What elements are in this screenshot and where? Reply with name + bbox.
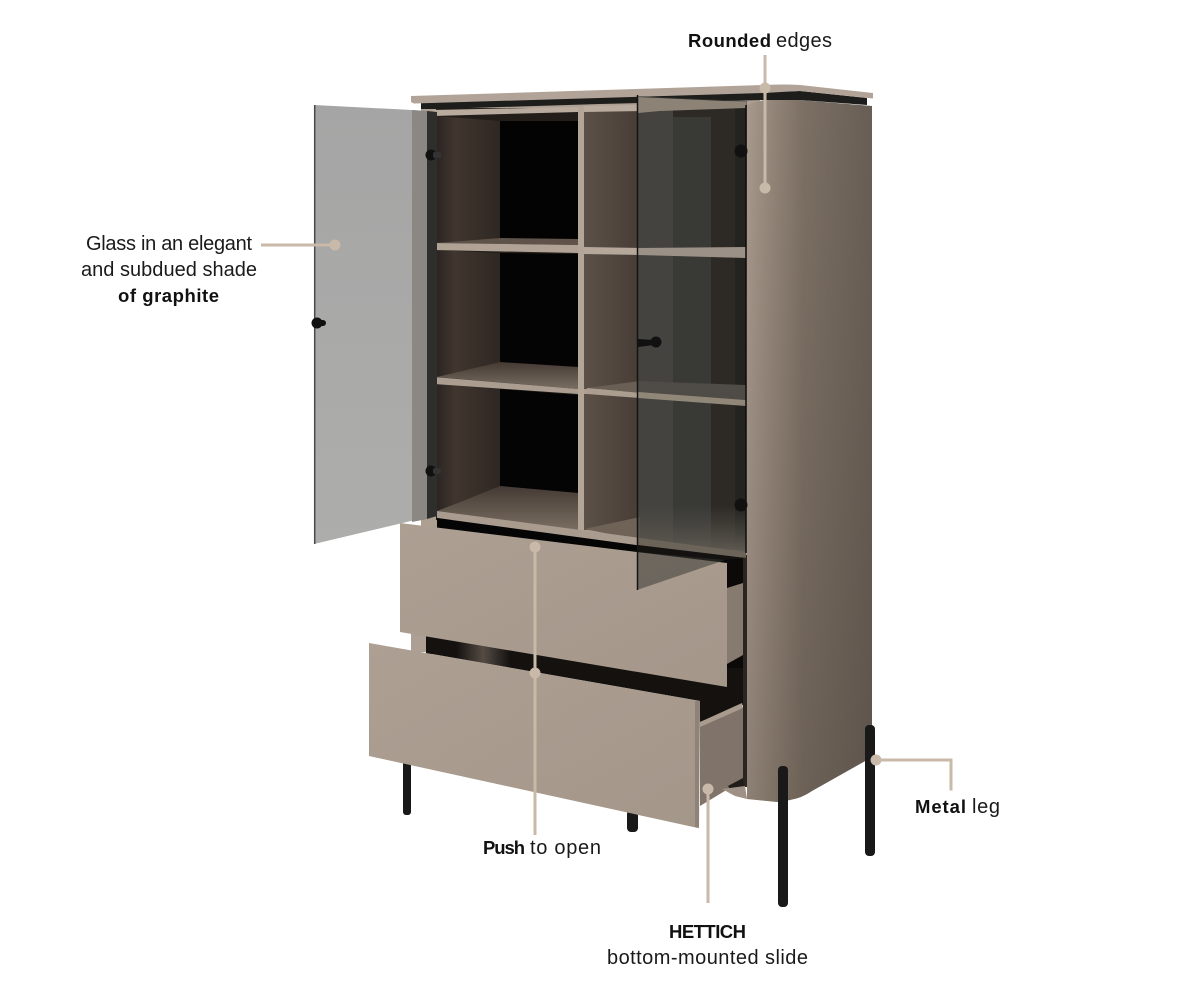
left door hinges and knob: [312, 150, 441, 476]
side panel with rounded edge: [746, 100, 872, 802]
bottom shelf: [437, 511, 746, 590]
lower carcass gap: [411, 555, 747, 787]
callout: push to open: Push: [483, 837, 525, 858]
callout: rounded edges: [688, 30, 832, 194]
rear legs: [403, 760, 638, 832]
lower drawer front: [369, 643, 700, 828]
callout: metal leg: Metal: [915, 796, 966, 817]
left shelves: [433, 107, 578, 530]
open left glass door: [314, 105, 437, 544]
upper drawer front: [400, 523, 727, 687]
callout: rounded edges: edges: [776, 30, 832, 52]
cabinet: [312, 84, 875, 907]
callout: rounded edges: Rounded: [688, 30, 771, 51]
carcass frame: [421, 96, 760, 640]
right glass door: [637, 95, 747, 590]
callout: glass: and subdued shade: [81, 259, 257, 281]
callout: push to open: to open: [530, 837, 601, 859]
top slab: [411, 84, 873, 109]
callout: metal leg: [870, 754, 1000, 818]
callout: glass: [81, 233, 340, 306]
right compartment interior: [584, 105, 746, 550]
left compartment interior: [436, 108, 578, 520]
vertical divider: [578, 106, 584, 533]
callout: metal leg: leg: [972, 796, 1000, 818]
callout: hettich slide: HETTICH: [669, 921, 746, 942]
right door hinges and knob: [638, 144, 748, 512]
callout: hettich slide: [607, 784, 808, 969]
callout: glass: Glass in an elegant: [86, 233, 252, 255]
callout: glass: of graphite: [118, 285, 219, 306]
callout: push to open: [483, 542, 601, 859]
drawer sides: [700, 583, 747, 806]
callout: hettich slide: bottom-mounted slide: [607, 947, 808, 969]
front legs: [778, 725, 875, 907]
